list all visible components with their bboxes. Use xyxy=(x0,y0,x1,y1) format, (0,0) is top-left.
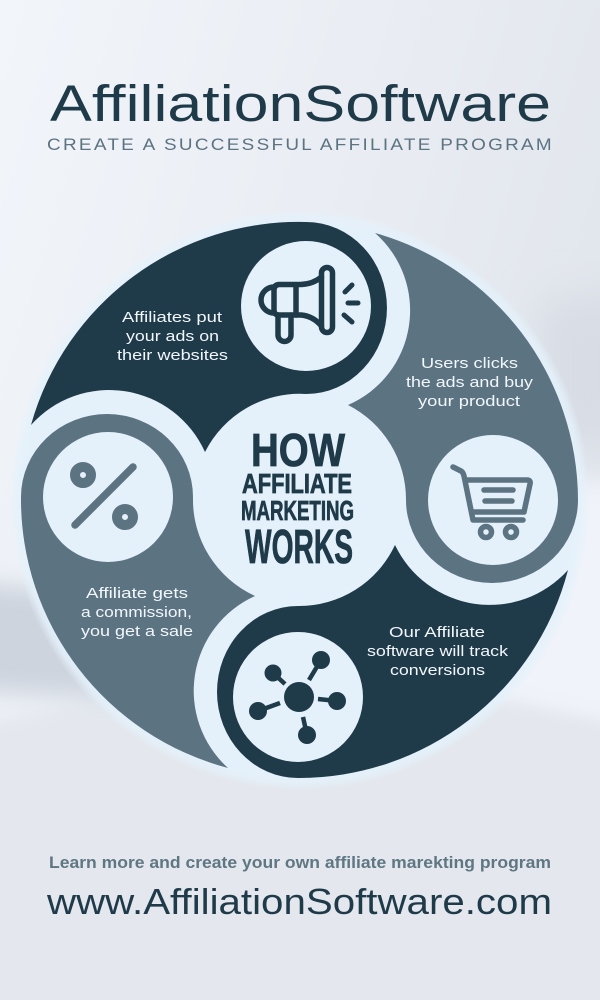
icon: percent sign xyxy=(43,432,173,562)
website url: www.AffiliationSoftware.com xyxy=(46,881,552,922)
icon: shopping cart xyxy=(428,435,558,565)
text: step 1 label: their websites xyxy=(117,347,228,364)
text: step 3 label: conversions xyxy=(390,662,485,679)
light disc backing xyxy=(10,210,590,790)
text: step 1 label: your ads on xyxy=(126,328,219,345)
text: step 1 label: Affiliates put xyxy=(122,309,223,326)
text: step 3 label: Our Affiliate xyxy=(389,624,485,641)
text: step 4 label xyxy=(81,585,193,640)
brand title: AffiliationSoftware xyxy=(50,75,551,132)
text: step 3 label xyxy=(367,624,509,679)
panel: step 4 grey segment xyxy=(21,414,255,768)
panel: step 1 dark segment xyxy=(31,222,387,452)
text: step 2 label: the ads and buy xyxy=(406,374,534,391)
text: step 2 label: your product xyxy=(418,393,521,410)
icon: megaphone xyxy=(241,241,371,371)
text: step 2 label xyxy=(406,355,534,410)
panel: step 3 dark segment xyxy=(217,545,568,778)
text: step 2 label: Users clicks xyxy=(421,355,518,372)
panel: step 2 grey segment xyxy=(348,233,578,583)
text: step 4 label: you get a sale xyxy=(81,623,193,640)
icon: network hub xyxy=(233,632,363,762)
heading: how affiliate marketing works: WORKS xyxy=(245,521,353,574)
text: step 3 label: software will track xyxy=(367,643,509,660)
heading: how affiliate marketing works xyxy=(241,424,354,574)
call to action text: Learn more and create your own affiliate marekting program xyxy=(49,853,551,872)
text: step 4 label: a commission, xyxy=(81,604,192,621)
heading: how affiliate marketing works: AFFILIATE xyxy=(242,468,352,499)
text: step 4 label: Affiliate gets xyxy=(86,585,188,602)
heading: how affiliate marketing works: HOW xyxy=(251,424,345,476)
text: step 1 label xyxy=(117,309,228,364)
heading: how affiliate marketing works: MARKETING xyxy=(241,495,354,526)
tagline: CREATE A SUCCESSFUL AFFILIATE PROGRAM xyxy=(47,136,554,154)
circular diagram xyxy=(10,210,590,790)
